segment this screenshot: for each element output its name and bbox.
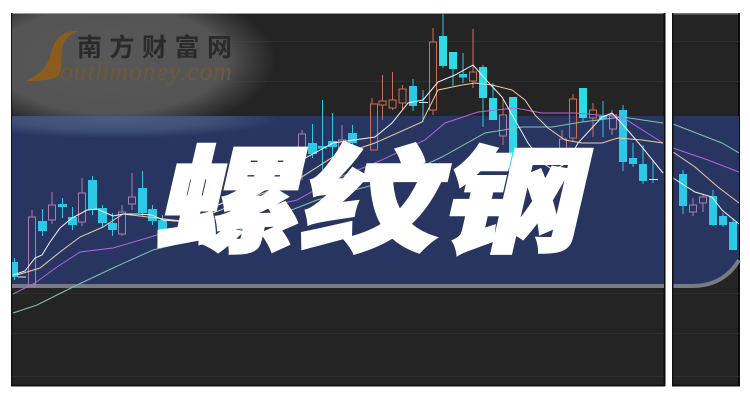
panel: blue band main <box>12 116 664 288</box>
teal line <box>13 117 663 313</box>
candlestick chart <box>11 13 737 286</box>
logo glow <box>12 14 266 116</box>
logo latin name: outhmoney.com <box>60 57 233 86</box>
hollow orange candles <box>370 28 596 150</box>
pale orange line <box>17 83 663 275</box>
panel: side chart frame <box>672 13 740 386</box>
moving average lines <box>13 65 739 313</box>
cyan candles <box>11 13 737 280</box>
logo chinese name: 南方财富网 <box>77 33 240 62</box>
white line <box>13 65 663 275</box>
title: 螺纹钢 <box>147 138 602 268</box>
hollow pink candles <box>28 110 706 286</box>
purple line <box>13 108 663 294</box>
icon: brown S swoosh <box>26 31 80 81</box>
panel: blue band side with rounded corner <box>674 116 739 286</box>
logo: southmoney <box>26 31 240 86</box>
